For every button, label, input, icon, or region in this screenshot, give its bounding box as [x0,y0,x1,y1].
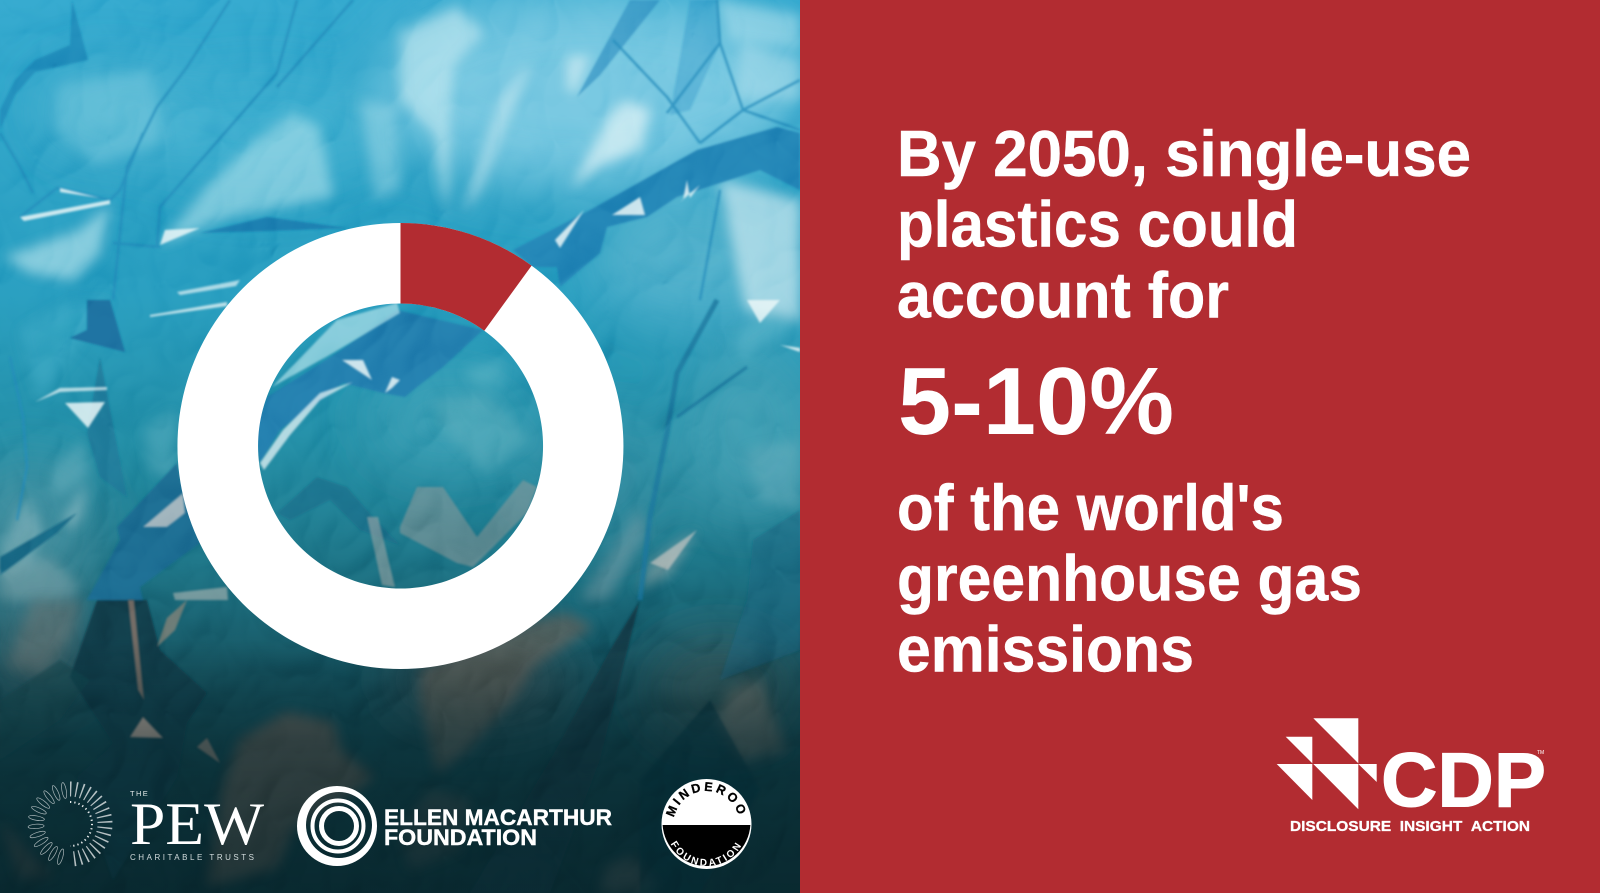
Ellen MacArthur wordmark [384,805,612,850]
Foundation arc text: FOUNDATION [670,840,741,866]
bright plastic glints [20,180,800,763]
pale plastic highlights [0,0,800,600]
CDP wordmark: CDP [1381,738,1546,824]
donut chart: 10 percent [177,223,623,669]
heading: statistic intro: account for [897,258,1229,331]
key figure: 5-10%: 5-10% [898,348,1174,455]
logo: CDP [1277,718,1546,835]
icon: Pew sunburst [28,782,105,865]
background photo: crumpled blue plastic [0,0,820,893]
donut red segment [400,223,532,331]
crumple texture [0,0,810,893]
Pew wordmark: THE [130,789,149,798]
soft light and shadow zones [0,0,820,740]
CDP tagline: DISCLOSURE INSIGHT ACTION [1290,819,1530,835]
text: statistic conclusion: emissions [897,612,1194,686]
text: statistic conclusion [897,471,1362,686]
warm brown reflections [0,600,785,893]
donut ring [177,223,623,669]
logo: Minderoo Foundation [662,779,752,869]
deep blue folds [0,0,800,893]
icon: CDP triangles [1277,718,1377,809]
heading: statistic intro: By 2050, single-use [897,117,1471,190]
lower shading [0,640,800,893]
Pew wordmark: CHARITABLE TRUSTS [130,853,254,862]
Ellen MacArthur wordmark: FOUNDATION [384,825,537,850]
fold creases [0,0,800,520]
Pew wordmark: PEW [130,791,264,857]
heading: statistic intro [897,117,1471,331]
panel: red statistic panel [800,0,1600,893]
Ellen MacArthur wordmark: ELLEN MACARTHUR [384,805,612,830]
logo: Pew Charitable Trusts [28,782,264,865]
text: statistic conclusion: greenhouse gas [897,542,1362,614]
text: statistic conclusion: of the world's [897,471,1284,544]
logo: Ellen MacArthur Foundation [297,786,612,866]
logo: CDP: TM [1537,750,1544,756]
heading: statistic intro: plastics could [897,188,1298,261]
Minderoo arc text: MINDEROO [666,782,746,817]
icon: concentric spiral [297,786,377,866]
